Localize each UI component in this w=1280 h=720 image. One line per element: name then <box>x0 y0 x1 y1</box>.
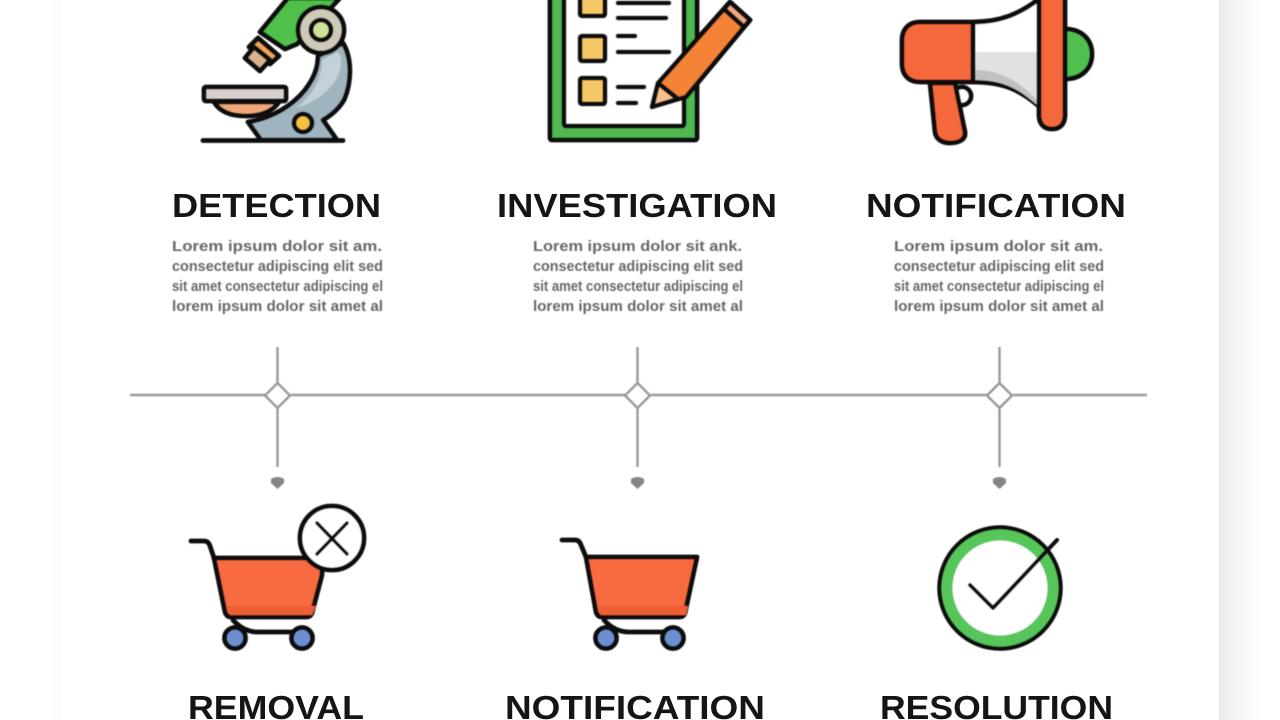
text block: investigation: sit amet consectetur adipiscing el <box>533 278 743 295</box>
timeline <box>130 347 1147 489</box>
text block: detection: Lorem ipsum dolor sit am. <box>172 238 382 255</box>
text block: detection: lorem ipsum dolor sit amet al <box>172 298 383 315</box>
icon: microscope <box>203 0 350 140</box>
text block: detection: consectetur adipiscing elit sed <box>172 258 383 275</box>
text block: detection <box>172 238 383 315</box>
text block: notification: lorem ipsum dolor sit amet al <box>894 298 1104 315</box>
step: removal <box>188 506 364 720</box>
text block: investigation: consectetur adipiscing elit sed <box>533 258 743 275</box>
step: notification (bottom) <box>505 540 765 720</box>
heading: investigation: INVESTIGATION <box>497 187 777 224</box>
step: investigation <box>497 0 777 315</box>
text block: detection: sit amet consectetur adipiscing el <box>172 278 383 295</box>
icon: cart <box>562 540 697 648</box>
heading: notification: NOTIFICATION <box>866 187 1126 224</box>
text block: investigation: lorem ipsum dolor sit amet al <box>533 298 743 315</box>
icon: clipboard checklist <box>550 0 750 140</box>
text block: investigation: Lorem ipsum dolor sit ank. <box>533 238 742 255</box>
text block: notification: Lorem ipsum dolor sit am. <box>894 238 1103 255</box>
text block: notification: consectetur adipiscing elit sed <box>894 258 1104 275</box>
step: resolution <box>880 528 1113 720</box>
step: notification <box>866 0 1126 315</box>
text block: investigation <box>533 238 743 315</box>
step: detection <box>172 0 383 315</box>
text block: notification: sit amet consectetur adipiscing el <box>894 278 1104 295</box>
icon: megaphone <box>902 0 1092 143</box>
heading: detection: DETECTION <box>172 187 381 224</box>
icon: cart with cross <box>191 506 364 648</box>
text block: notification <box>894 238 1104 315</box>
icon: check circle <box>940 528 1060 648</box>
